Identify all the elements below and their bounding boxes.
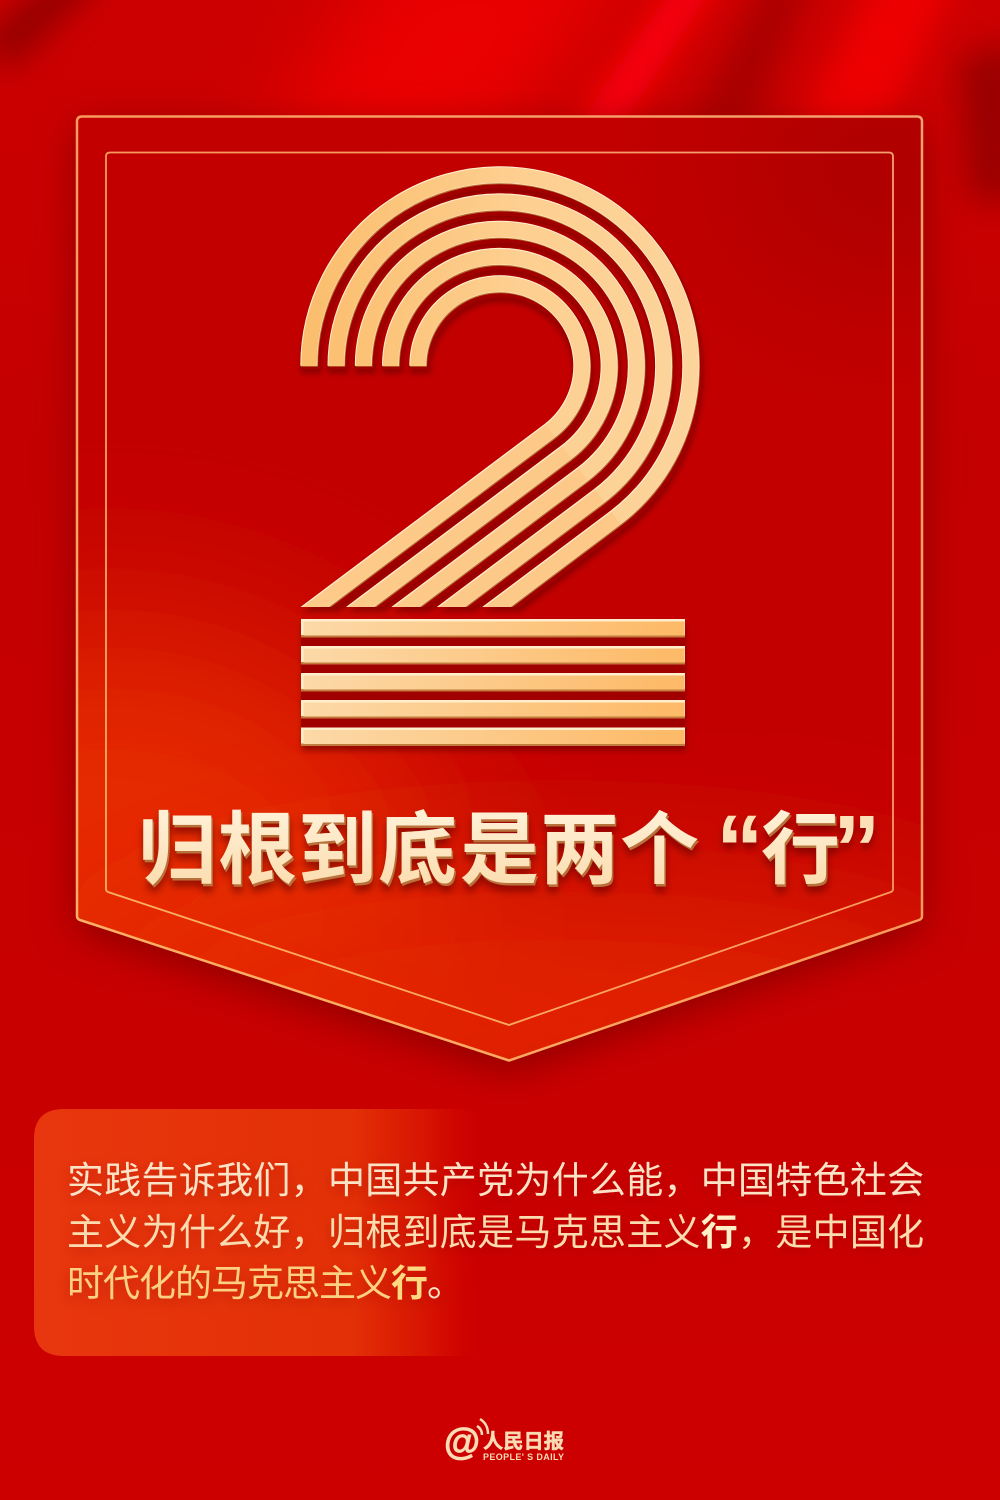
icon: at sign with signal arcs: @ [444, 1421, 480, 1462]
title: ” [833, 796, 880, 902]
numeral stripes: five base bars [301, 619, 685, 746]
numeral stripes: curve and diagonal [302, 175, 692, 620]
shield inner outline [106, 152, 893, 1025]
shield glow shading [78, 118, 921, 1059]
title: 行 [761, 805, 840, 894]
title: “ [716, 796, 764, 902]
panel: body text [34, 1109, 924, 1356]
title: 归根到底是两个 [138, 805, 699, 894]
body paragraph [67, 1160, 924, 1304]
logo English name: PEOPLE' S DAILY [483, 1452, 564, 1462]
body paragraph: 主义为什么好，归根到底是马克思主义行，是中国化 [67, 1212, 924, 1253]
title [138, 796, 880, 902]
shield outer outline stroke [77, 116, 922, 1060]
silk drapery highlights [0, 0, 1000, 200]
logo wordmark: 人民日报 [483, 1430, 564, 1453]
body paragraph: 实践告诉我们，中国共产党为什么能，中国特色社会 [67, 1160, 924, 1201]
big numeral 2 made of five gold stripes [301, 175, 692, 746]
logo: People's Daily [444, 1419, 564, 1462]
body paragraph: 时代化的马克思主义行。 [67, 1263, 463, 1304]
shield base fill with outer outline [77, 116, 922, 1060]
title: 归根到底是两个 [140, 808, 700, 896]
title: 行 [762, 808, 842, 896]
body panel background [34, 1109, 478, 1356]
panel: shield frame [56, 101, 943, 1086]
